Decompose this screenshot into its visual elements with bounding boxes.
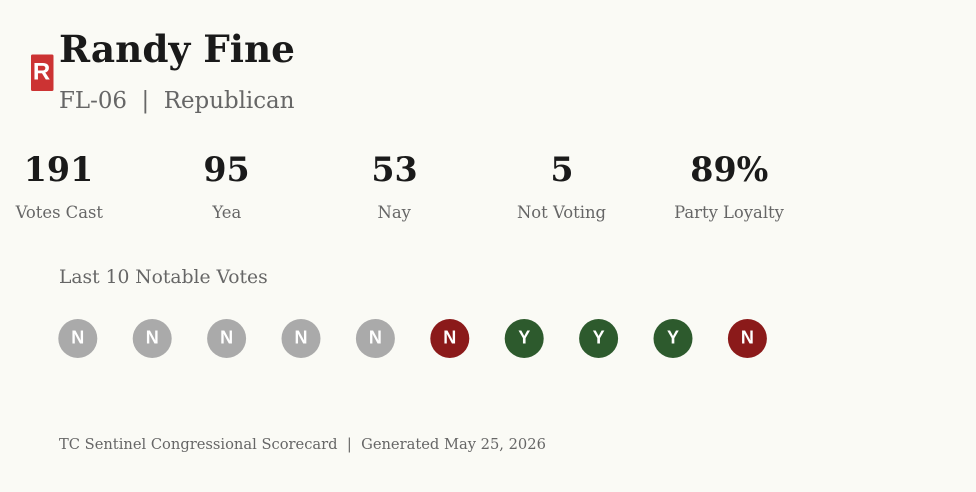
- vote 5: N: N: [369, 328, 382, 348]
- stat: nay: 53: [371, 150, 418, 189]
- stat: not voting: [517, 150, 607, 222]
- section heading: Last 10 Notable Votes: [59, 267, 268, 288]
- stat: not voting: 5: [550, 150, 574, 189]
- vote 4: N: [282, 319, 320, 358]
- vote 10: N: [728, 319, 767, 358]
- vote 8: Y: [579, 319, 618, 358]
- stat: not voting: Not Voting: [517, 203, 607, 222]
- vote 8: Y: Y: [593, 328, 605, 348]
- vote 3: N: [207, 319, 246, 358]
- stat: yea: 95: [203, 150, 250, 189]
- stat: party loyalty: 89%: [690, 150, 768, 189]
- stat: party loyalty: Party Loyalty: [674, 203, 785, 222]
- vote 2: N: N: [146, 328, 159, 348]
- icon: party badge: [31, 54, 54, 91]
- stat: yea: [203, 150, 250, 222]
- vote 1: N: N: [71, 328, 84, 348]
- stat: votes cast: [15, 150, 103, 222]
- vote 9: Y: Y: [667, 328, 679, 348]
- footer: TC Sentinel Congressional Scorecard | Generated May 25, 2026: [59, 436, 546, 453]
- stat: votes cast: Votes Cast: [15, 203, 103, 222]
- vote 7: Y: Y: [518, 328, 530, 348]
- stat: yea: Yea: [211, 203, 241, 222]
- title: Randy Fine: [59, 27, 295, 71]
- vote 6: N: N: [443, 328, 456, 348]
- stat: nay: [371, 150, 418, 222]
- vote 10: N: N: [741, 328, 754, 348]
- vote 3: N: N: [220, 328, 233, 348]
- vote 1: N: [58, 319, 97, 358]
- vote 2: N: [133, 319, 172, 358]
- vote dots row: [58, 319, 767, 358]
- vote 6: N: [430, 319, 469, 358]
- vote 5: N: [356, 319, 395, 358]
- stat: nay: Nay: [378, 203, 412, 222]
- vote 7: Y: [505, 319, 544, 358]
- vote 4: N: N: [294, 328, 308, 348]
- stat: party loyalty: [674, 150, 785, 222]
- icon: party badge: R: [33, 58, 50, 86]
- subtitle: FL-06 | Republican: [59, 88, 295, 114]
- vote 9: Y: [654, 319, 692, 358]
- stat: votes cast: 191: [24, 150, 93, 189]
